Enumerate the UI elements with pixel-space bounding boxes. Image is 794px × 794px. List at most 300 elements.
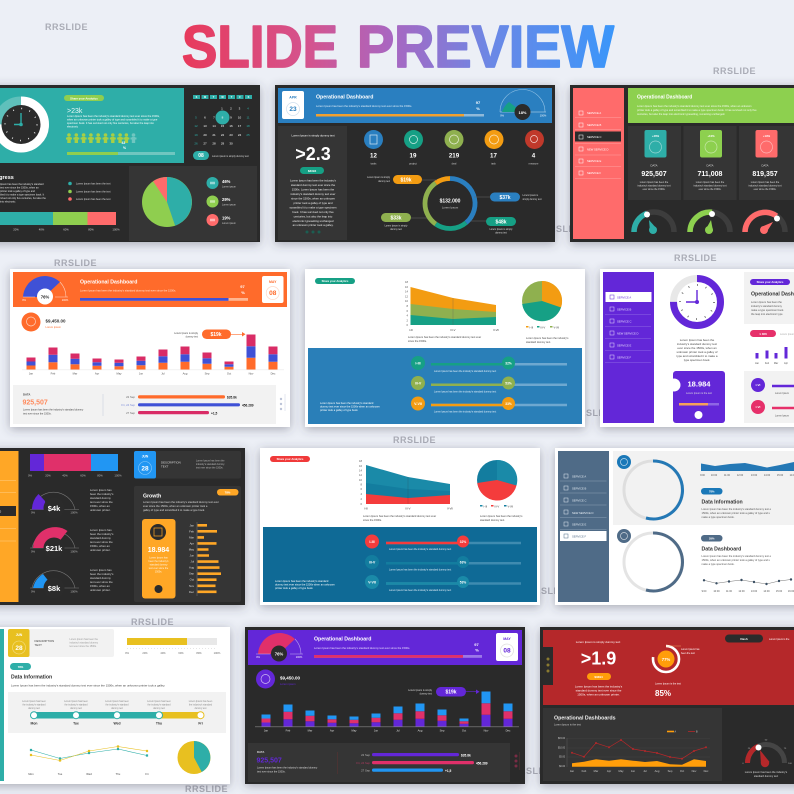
panel: top right	[744, 272, 794, 324]
gauge notes: 1500s, when an	[90, 504, 110, 508]
menu	[605, 292, 652, 362]
card: amber stat: text ever since the	[149, 567, 169, 570]
date card	[496, 633, 518, 661]
area chart: 10	[359, 478, 362, 482]
area chart: I-III	[409, 328, 413, 332]
card: purple stat	[668, 371, 725, 423]
line chart: 11:00	[726, 590, 733, 593]
description: Lorem Ipsum has been the	[70, 638, 99, 641]
timeline: Wed	[113, 722, 121, 726]
area chart: 2	[406, 318, 408, 322]
text: 1500s, when an unknown printer took a galley of type and s	[702, 511, 771, 515]
horizontal bar chart: Dec	[189, 590, 195, 594]
progress rows: I-VI	[756, 405, 760, 409]
menu: NEW SERVICE D	[587, 148, 609, 152]
progress rows	[365, 534, 521, 592]
callout: $19k	[210, 332, 222, 338]
bar chart: Oct	[227, 372, 231, 376]
date card: 08	[503, 648, 511, 655]
legend	[526, 326, 559, 330]
panel: slide 7 amber dark dashboard	[0, 448, 245, 605]
stat: 85%	[655, 689, 671, 698]
data stat	[256, 750, 318, 774]
panel: upper grey	[613, 451, 794, 525]
horizontal bar chart: Aug	[189, 566, 194, 570]
text block: bled it to make a type specimen book. It	[0, 194, 44, 196]
icon row with stats: 19	[410, 152, 417, 160]
calendar: F	[239, 96, 241, 99]
calendar: 1	[221, 106, 223, 110]
text block: printer took a galley of type and	[0, 190, 35, 193]
gauge: 100%	[540, 114, 547, 118]
progress rows: Lorem Ipsum has been the industry's standard dummy text	[434, 390, 496, 394]
gauge: 100	[788, 763, 793, 765]
timeline: Mon	[31, 722, 37, 726]
stacked bar	[0, 212, 120, 232]
panel: slide 11 purple dark dashboard	[245, 627, 525, 784]
text block: rvived not only five centuries, but also the	[0, 197, 46, 200]
line and area chart	[558, 738, 710, 773]
progress rows	[751, 378, 794, 418]
small bar chart	[755, 347, 788, 365]
area chart: 8	[360, 482, 362, 486]
text: Lorem Ipsum has been the industry's	[575, 684, 623, 688]
stacked bar: 20%	[45, 474, 51, 478]
line and area chart: Aug	[655, 769, 660, 773]
bar chart: Jul	[161, 372, 165, 376]
gauges: 100%	[70, 550, 78, 554]
line chart: 13:00	[751, 590, 758, 593]
progress rows: I-III	[415, 362, 421, 366]
icon row with stats: 4	[532, 152, 536, 160]
progress bar: 60%	[178, 651, 184, 655]
callouts: dummy text	[378, 180, 390, 183]
pill	[750, 330, 794, 337]
data stat: 925,507	[22, 400, 48, 406]
description: text ever since the 1500s.	[196, 466, 224, 470]
data cards: DATA	[761, 164, 769, 168]
panel: slide 3 coral and green dashboard	[570, 85, 794, 242]
text block: electronic	[67, 124, 79, 128]
paragraph: since the 1500s, when an unknown	[291, 196, 335, 200]
dots	[307, 230, 319, 234]
data cards: DATA	[706, 164, 714, 168]
gauge notes: standard dummy	[90, 576, 111, 580]
text: printer took a galley of type book.	[275, 586, 313, 590]
stats with icons: 29%	[222, 197, 231, 202]
text: 1500s, when an unknown printer.	[577, 692, 620, 696]
data cards: ever since the 1500s.	[754, 188, 777, 191]
panel: ocean	[263, 527, 537, 602]
menu: SERVICE C	[572, 498, 586, 502]
text: Lorem Ipsum has been the	[680, 338, 715, 342]
horizontal bars	[103, 394, 254, 416]
legend: B	[696, 730, 698, 734]
gauge notes: been the industry's	[90, 532, 114, 536]
callout	[174, 330, 246, 339]
gauge: 50	[765, 740, 768, 742]
data cards: 711,008	[698, 171, 723, 178]
bar chart: Apr	[95, 372, 99, 376]
gauge notes	[90, 488, 114, 592]
timeline: dummy text	[70, 707, 82, 710]
data stat: 925,507	[256, 758, 282, 764]
icon row: people: 43	[122, 141, 125, 145]
data stat: text ever since the 1500s.	[23, 412, 52, 416]
line chart: Wed	[86, 772, 92, 776]
progress bar	[67, 152, 175, 155]
legend: Lorem Ipsum has been the text	[76, 182, 111, 186]
progress rows: III-V	[415, 382, 422, 386]
menu: SERVICE F	[617, 356, 631, 360]
legend: V-VII	[554, 326, 559, 330]
panel: timeline	[8, 692, 226, 733]
date card: JUN	[16, 633, 23, 637]
data cards: Lorem Ipsum has been the	[751, 181, 780, 184]
panel: slide 9 slate dashboard	[555, 448, 794, 605]
stat: Lorem ipsum	[46, 325, 62, 329]
panel: description	[134, 451, 241, 478]
pie chart	[142, 177, 192, 227]
menu: SERVICE B	[617, 308, 631, 312]
card: amber stat: Lorem Ipsum has	[149, 556, 169, 560]
description: DESCRIPTION	[161, 460, 181, 464]
calendar: 29	[221, 142, 224, 146]
calendar: 25	[246, 133, 250, 137]
bar chart: May	[116, 372, 122, 376]
bar chart: Oct	[462, 728, 466, 732]
progress: 97	[474, 642, 479, 647]
gauge: 0%	[22, 299, 27, 302]
icon row with stats: project	[409, 162, 417, 166]
line chart: 10:00	[713, 590, 720, 593]
gauge	[500, 90, 547, 120]
menu: SERVICE C	[617, 320, 631, 324]
text: since the 1500s.	[408, 339, 427, 343]
stats with icons: Lorem ipsum	[222, 222, 236, 225]
date card: 28	[141, 465, 149, 472]
gauges: $4k	[48, 504, 61, 513]
timeline: dummy text	[111, 707, 123, 710]
horizontal bar chart: Apr	[190, 541, 194, 545]
callouts: $33k	[390, 216, 402, 222]
menu: SERVICE E	[587, 159, 601, 163]
line chart: Fri	[145, 772, 149, 776]
watermarks: RRSLIDE	[572, 408, 615, 418]
text: Lorem Ipsum has been the industry's	[480, 514, 523, 518]
text: Lorem Ipsum is simply dummy text	[576, 640, 620, 644]
menu: SERVICE F	[572, 534, 586, 538]
pagination dots	[280, 394, 285, 411]
callouts: $48k	[495, 220, 507, 226]
callouts: dummy text	[390, 228, 402, 231]
horizontal bar chart: Mar	[189, 535, 194, 539]
horizontal bar chart: Jul	[190, 560, 194, 564]
callouts: Lorem Ipsum is	[522, 194, 539, 197]
date card	[134, 451, 156, 478]
watermarks: RRSLIDE	[512, 766, 555, 776]
progress rows: 32%	[460, 540, 466, 544]
line and area chart: $10.00	[558, 748, 566, 750]
donut chart: Lorem Ipsum	[442, 206, 459, 210]
data stat: DATA	[257, 750, 264, 754]
gauge notes: text ever since the	[90, 540, 113, 544]
horizontal bars: $35.8k	[461, 753, 471, 757]
subtext: Lorem Ipsum has been the industry's standard dummy text ever since the 1500s.	[314, 646, 410, 650]
timeline: Lorem Ipsum has been	[189, 700, 213, 703]
gauge notes: 1500s, when an	[90, 584, 110, 588]
date card	[282, 91, 304, 119]
menu	[575, 111, 621, 178]
calendar: 28	[212, 142, 216, 146]
line chart: 15:00	[776, 590, 783, 593]
area chart: 15:00	[777, 474, 784, 477]
paragraph: industry's standard dummy text ever	[291, 192, 335, 196]
title: SLIDE	[182, 14, 338, 80]
calendar	[193, 96, 252, 160]
pill: Dash	[740, 637, 748, 641]
horizontal bar chart: Jan	[189, 523, 194, 527]
date card	[8, 629, 30, 657]
text: make a type specimen book.	[702, 562, 735, 566]
menu: NEW SERVICE D	[617, 332, 639, 336]
timeline: Fri	[198, 722, 203, 726]
calendar: 15	[221, 124, 224, 128]
horizontal bar chart: Sep	[189, 572, 194, 576]
progress: %	[476, 106, 480, 111]
text: make a type specimen book.	[702, 515, 735, 519]
horizontal bar chart: Feb	[189, 529, 194, 533]
sidebar	[558, 451, 609, 602]
panel: blue header	[278, 88, 552, 123]
area chart: 9:00	[700, 474, 706, 477]
text: unknown printer took a galley of	[677, 350, 718, 354]
pill	[701, 535, 722, 542]
horizontal bars: Fri, 24 Sep	[356, 761, 370, 765]
panel: teal header	[0, 88, 184, 163]
horizontal bar chart	[189, 522, 221, 596]
panel: green header	[628, 88, 794, 123]
stat: 23k: >23k	[67, 108, 83, 115]
area chart: 6	[360, 487, 362, 491]
panel: left stat	[278, 126, 347, 240]
date card: MAY	[503, 637, 511, 641]
icon row with stats: 219	[449, 152, 460, 160]
text: Lorem Ipsum has been the industry's standard dummy text e	[702, 554, 772, 558]
calendar: 13	[203, 124, 207, 128]
progress	[316, 100, 484, 116]
panel: orange header	[13, 272, 287, 307]
stat	[46, 318, 66, 329]
text: standard dummy text ever since the	[576, 688, 622, 692]
area chart: 12	[359, 473, 362, 477]
menu: SERVICE A	[572, 474, 586, 478]
line chart: 16:00	[788, 590, 794, 593]
text: Lorem Ipsum has been the industry's	[526, 336, 569, 340]
data cards: DATA	[650, 164, 658, 168]
calendar: 12	[194, 124, 198, 128]
gauge notes: Lorem Ipsum has	[90, 568, 112, 572]
gauges: 0%	[31, 550, 36, 554]
area chart: V-VII	[447, 506, 453, 510]
panel: growth	[134, 486, 241, 602]
area chart: 6	[406, 309, 408, 313]
text: type specimen book.	[684, 358, 710, 362]
timeline: dummy text	[28, 707, 40, 710]
pill: $3394	[308, 169, 317, 173]
progress rows: III-V	[369, 560, 376, 564]
text block: when an unknown printer took a galley of type and scrambled it to make a type	[67, 118, 158, 122]
panel: pie	[129, 166, 257, 241]
calendar: 16	[229, 124, 233, 128]
area chart: 10	[405, 299, 408, 303]
description: text ever since the 1500s.	[70, 645, 97, 648]
heading: Data Information	[11, 674, 52, 680]
calendar: 26	[194, 142, 198, 146]
bar chart: Jul	[396, 728, 400, 732]
date card: MAY	[269, 280, 277, 284]
callouts: Lorem Ipsum is simply	[367, 176, 391, 179]
timeline: the industry's standard	[105, 704, 129, 706]
pill	[300, 167, 324, 174]
paragraph: book. It has survived not only five	[292, 210, 334, 214]
menu: SERVICE A	[617, 296, 631, 300]
progress	[314, 642, 482, 658]
icon: orange badge	[22, 312, 40, 332]
area chart: 8	[406, 304, 408, 308]
icon row with stats: tasks	[371, 162, 377, 166]
stacked bar: 60%	[63, 228, 69, 232]
stats with icons	[206, 177, 236, 226]
gauge: Lorem Ipsum has been the industry's	[745, 770, 788, 774]
heading: Data Dashboard	[702, 546, 741, 552]
menu: SERVICE C	[587, 135, 601, 139]
text: Lorem Ipsum has been the industry's standard dummy text ever since the 1500s, when an unknown	[637, 104, 752, 108]
area chart: 0	[406, 323, 408, 327]
icon: purple badge	[256, 670, 275, 688]
gauges: 100%	[70, 590, 78, 594]
menu	[560, 474, 606, 541]
stat: $9,450.00	[280, 676, 301, 680]
progress: %	[475, 648, 479, 652]
text: Lorem Ipsum has been the industry's standard	[275, 579, 329, 583]
timeline: Lorem Ipsum has been	[22, 700, 46, 703]
stat: Lorem ipsum	[280, 682, 296, 686]
text: Lorem Ipsum has been the	[751, 300, 782, 304]
gauge notes: been the industry's	[90, 492, 114, 496]
gauge: 0%	[256, 656, 261, 659]
title	[182, 14, 614, 80]
line and area chart: Mar	[594, 769, 598, 773]
pill: 29%	[709, 536, 715, 540]
panel: slide 8 red and ocean dashboard	[260, 448, 540, 605]
horizontal bars: 27 Sep	[126, 411, 135, 415]
panel: slide 1 teal dark dashboard	[0, 85, 260, 242]
bar chart: Nov	[484, 728, 489, 732]
pill: Share your Analytics	[277, 457, 304, 461]
progress rows: Lorem Ipsum has been the industry's standard dummy text	[434, 410, 496, 414]
gauge notes: been the industry's	[90, 572, 114, 576]
gauge: 0%	[500, 114, 505, 118]
horizontal bars: 22 Sep	[361, 753, 370, 757]
calendar: S	[196, 96, 198, 99]
stacked bar: 40%	[62, 474, 68, 478]
horizontal bars: +1,5	[445, 769, 452, 773]
calendar: S	[248, 96, 250, 99]
bar chart: Feb	[286, 728, 291, 732]
pill: 78%	[225, 490, 231, 494]
heading: Data Information	[702, 500, 743, 506]
legend	[667, 730, 698, 734]
pill: Share your Analytics	[757, 280, 784, 284]
calendar: 27	[203, 142, 207, 146]
icon	[617, 455, 631, 469]
watermarks: RRSLIDE	[131, 617, 174, 627]
area chart	[359, 459, 453, 510]
paragraph: standard dummy text ever since the	[291, 183, 336, 187]
small bar chart: Jan	[755, 362, 760, 365]
calendar: 2	[230, 106, 232, 110]
text: ever since the 1500s, when an	[677, 346, 717, 350]
gauge: 100%	[296, 656, 303, 659]
gauge notes: text ever since the	[90, 500, 113, 504]
paragraph: 1500s. Lorem Ipsum has been the	[292, 188, 335, 192]
line and area chart: Jun	[631, 769, 636, 773]
stats with icons: 46%	[222, 179, 231, 184]
calendar: 7	[213, 116, 215, 120]
gauge notes: 1500s, when an	[90, 544, 110, 548]
donut: 77%	[662, 657, 670, 662]
card: amber stat: standard dummy	[150, 564, 168, 566]
calendar: T	[231, 96, 233, 99]
small bar chart: Mar	[774, 362, 778, 365]
calendar: 4	[247, 106, 249, 110]
description: Lorem Ipsum has been the	[196, 460, 225, 462]
gauges: 0%	[31, 510, 36, 514]
menu: SERVICE F	[587, 171, 601, 175]
gauge notes: Lorem Ipsum has	[90, 528, 112, 532]
bar chart: Jan	[29, 372, 34, 376]
timeline: the industry's standard	[22, 704, 46, 706]
calendar: 19	[194, 133, 198, 137]
data stat: Lorem Ipsum has been the industry's standard dummy	[23, 408, 84, 412]
icon row: people	[66, 133, 136, 150]
area chart: 2	[360, 497, 362, 501]
watermarks: RRSLIDE	[54, 258, 97, 268]
description: industry's standard dummy	[70, 642, 99, 644]
data cards	[628, 126, 794, 200]
area chart: 16	[359, 464, 362, 468]
area chart: V-VII	[493, 328, 499, 332]
progress: 97	[476, 100, 481, 105]
gauge: standard dummy text	[754, 774, 778, 778]
area chart: 11:00	[724, 474, 731, 477]
pill: $3394	[594, 675, 603, 679]
data cards: industry's standard dummy text	[748, 184, 782, 188]
side tab	[543, 647, 553, 685]
pill: share your analytics	[64, 95, 104, 101]
icon row with stats: deal	[452, 162, 457, 166]
data cards: 819,357	[752, 171, 778, 178]
progress: %	[241, 290, 245, 295]
bar chart: Jan	[264, 728, 269, 732]
legend	[480, 504, 513, 508]
menu: SERVICE B	[587, 123, 601, 127]
text: printer took a galley of type book.	[320, 408, 358, 412]
callouts	[367, 175, 542, 234]
sidebar	[573, 88, 624, 239]
panel: slide 4 orange white dashboard	[10, 269, 290, 427]
